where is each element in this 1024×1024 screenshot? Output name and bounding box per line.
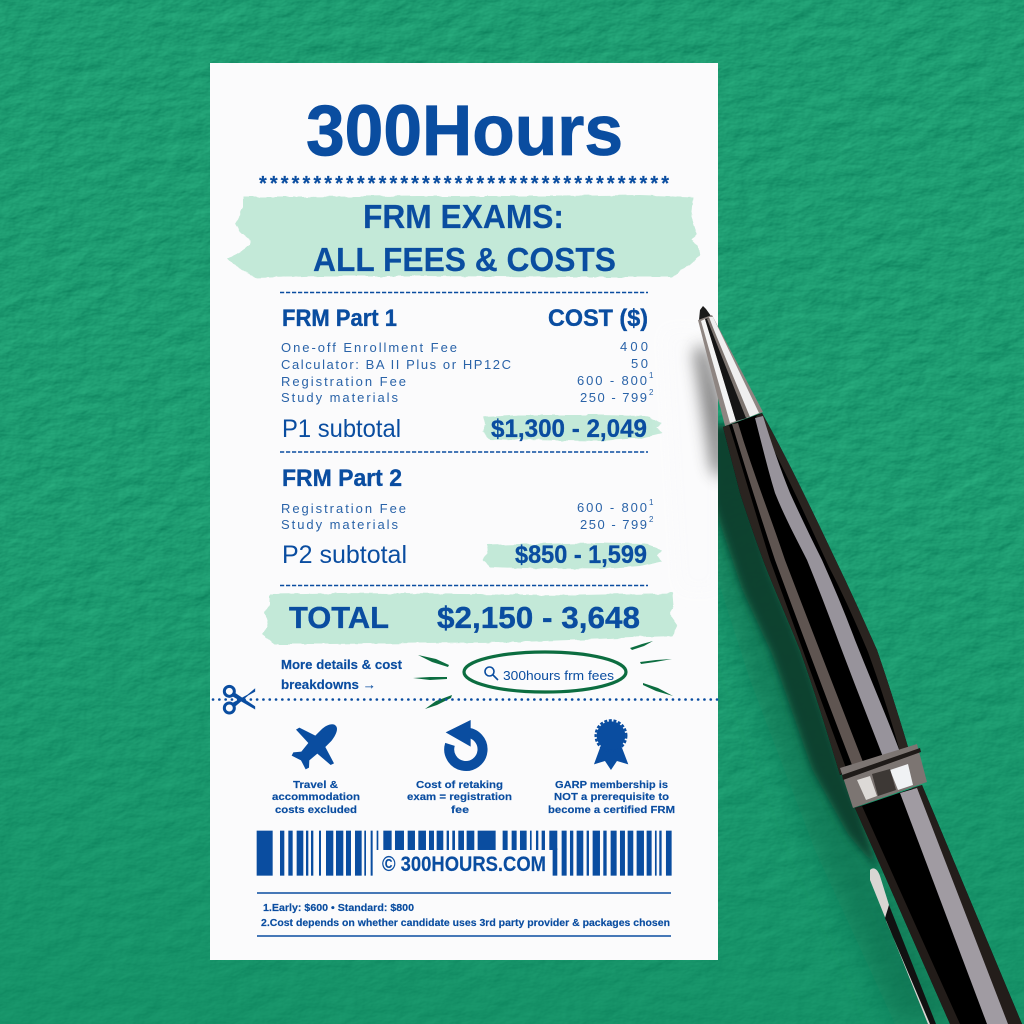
- line items part 1: Study materials: [281, 390, 398, 405]
- text: GARP note: become a certified FRM: [548, 804, 675, 816]
- line items part 1: 400: [620, 339, 648, 354]
- line items part 1: 1: [649, 371, 654, 380]
- subtotal part 1: $1,300 - 2,049: [491, 415, 647, 443]
- pen metal cone: [698, 315, 763, 426]
- heading: FRM Exams all fees and costs: [313, 198, 616, 278]
- search callout: [413, 641, 673, 709]
- line items part 1: Calculator: BA II Plus or HP12C: [281, 357, 511, 372]
- line items part 2: 600 - 800: [577, 500, 647, 515]
- text: retake note: exam = registration: [407, 791, 512, 803]
- heading: FRM Exams all fees and costs: ALL FEES & COSTS: [313, 241, 616, 278]
- text: travel note: accommodation: [272, 791, 360, 803]
- text: retake note: Cost of retaking: [416, 779, 503, 791]
- line items part 1: [281, 339, 654, 405]
- highlight brush behind heading: [228, 195, 700, 278]
- text: GARP note: NOT a prerequisite to: [554, 791, 669, 803]
- panel: white receipt: [210, 63, 718, 960]
- line items part 1: One-off Enrollment Fee: [281, 340, 457, 355]
- hand-drawn oval: [464, 652, 626, 692]
- footnotes: 1.Early: $600 • Standard: $800: [263, 903, 415, 914]
- barcode: [257, 831, 672, 876]
- pen clip: [870, 868, 936, 1024]
- line items part 2: 1: [649, 498, 654, 507]
- footnotes: [261, 903, 670, 929]
- subtotal part 1: [282, 415, 662, 443]
- icon: retake arrow: [446, 720, 483, 766]
- line items part 1: Registration Fee: [281, 374, 406, 389]
- subtotal part 2: P2 subtotal: [282, 541, 407, 569]
- total band: TOTAL: [289, 600, 389, 635]
- pen band: [840, 744, 927, 808]
- section heading: FRM Part 2: FRM Part 2: [282, 465, 402, 492]
- pen barrel upper: [723, 413, 908, 775]
- footnotes: 2.Cost depends on whether candidate uses 3rd party provider & packages chosen: [261, 918, 670, 929]
- total band: [262, 593, 677, 644]
- more details text: [281, 658, 403, 692]
- emphasis rays: [413, 641, 673, 709]
- subtotal part 2: $850 - 1,599: [515, 541, 647, 569]
- line items part 1: 2: [649, 388, 654, 397]
- icon: airplane: [292, 724, 337, 769]
- search text: 300hours frm fees: [503, 669, 614, 683]
- line items part 1: 50: [631, 356, 648, 371]
- line items part 2: 2: [649, 515, 654, 524]
- line items part 1: 600 - 800: [577, 373, 647, 388]
- more details text: breakdowns →: [281, 678, 376, 692]
- line items part 2: [281, 498, 654, 532]
- note: GARP: [548, 720, 675, 816]
- pen shadow on background: [705, 420, 960, 1024]
- text: GARP note: GARP membership is: [555, 779, 668, 791]
- section: FRM Part 1: [281, 305, 662, 443]
- icon: scissors: [224, 686, 255, 713]
- title: 300Hours: 300Hours: [306, 92, 623, 171]
- pen barrel lower: [855, 785, 1022, 1024]
- text: retake note: fee: [451, 804, 469, 816]
- text: travel note: [272, 779, 360, 816]
- line items part 2: Registration Fee: [281, 501, 406, 516]
- dotted cut line: [213, 698, 718, 701]
- asterisk divider: **************************************: [259, 173, 669, 195]
- subtotal part 2: [282, 541, 662, 569]
- section: FRM Part 2: [281, 465, 662, 569]
- more details text: More details & cost: [281, 658, 403, 672]
- text: travel note: Travel &: [293, 779, 338, 791]
- line items part 2: 250 - 799: [580, 517, 647, 532]
- icon: magnifier: [485, 667, 498, 680]
- total band: $2,150 - 3,648: [437, 600, 640, 635]
- column heading: cost: COST ($): [548, 305, 648, 332]
- section heading: FRM Part 1: FRM Part 1: [282, 305, 397, 332]
- pen shadow on paper: [684, 338, 718, 486]
- text: travel note: costs excluded: [275, 804, 357, 816]
- text: retake note: [407, 779, 512, 816]
- heading: FRM Exams all fees and costs: FRM EXAMS:: [363, 198, 564, 235]
- note: travel: [272, 724, 360, 816]
- barcode label: © 300HOURS.COM: [382, 853, 546, 876]
- text: GARP note: [548, 779, 675, 816]
- subtotal part 1: P1 subtotal: [282, 415, 401, 443]
- pen tip ball: [699, 306, 711, 320]
- line items part 1: 250 - 799: [580, 390, 647, 405]
- line items part 2: Study materials: [281, 517, 398, 532]
- note: retake: [407, 720, 512, 816]
- pen: [698, 306, 1022, 1024]
- icon: rosette: [594, 720, 628, 770]
- notes row with icons: [272, 720, 675, 816]
